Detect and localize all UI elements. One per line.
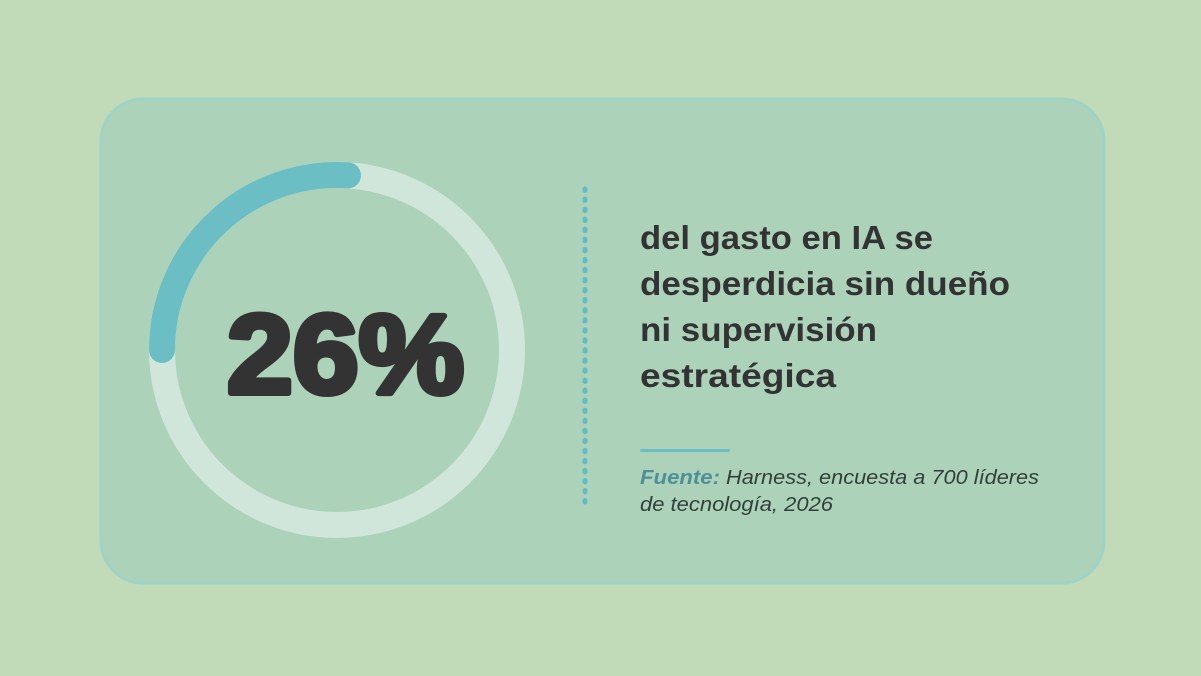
main statement (640, 219, 1010, 394)
line 4: estratégica (640, 357, 837, 394)
line 1: del gasto en IA se (640, 219, 933, 256)
line 2: desperdicia sin dueño (640, 265, 1010, 302)
line 3: ni supervisión (640, 311, 877, 348)
card background (101, 99, 1104, 583)
donut value arc (162, 175, 348, 350)
dotted divider (582, 189, 588, 502)
big number: 26% (227, 292, 464, 417)
source text line 1: Harness, encuesta a 700 líderes (726, 467, 1039, 489)
donut track (162, 175, 512, 525)
source note (640, 467, 1039, 516)
source text line 2: de tecnología, 2026 (640, 494, 834, 516)
source label: Fuente: (640, 467, 720, 489)
accent rule (640, 449, 730, 452)
panel: stat card (101, 99, 1104, 583)
donut chart: 26 percent (162, 175, 512, 525)
